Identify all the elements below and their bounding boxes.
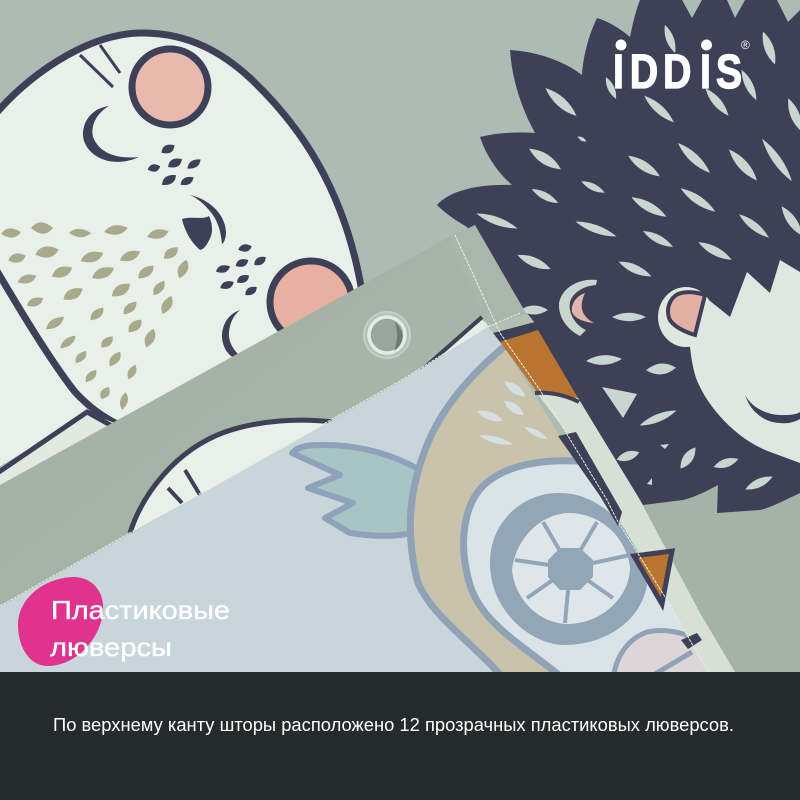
grey strip — [449, 225, 527, 327]
strip dark arc — [535, 393, 579, 402]
strip dark edge band — [558, 432, 622, 526]
teal leaf — [292, 445, 420, 536]
heading line 2: люверсы — [50, 632, 172, 662]
front fabric print — [0, 320, 720, 680]
logo dots — [616, 40, 712, 51]
bear ear lines — [80, 45, 120, 87]
wheel hub — [548, 548, 593, 590]
hedgehog small marks — [647, 444, 669, 485]
bear whisker dots — [216, 244, 266, 296]
bear nose — [182, 216, 212, 250]
caption text: По верхнему канту шторы расположено 12 прозрачных пластиковых люверсов. — [53, 715, 734, 735]
grommet — [364, 312, 410, 358]
wheel inner — [512, 513, 630, 624]
front fabric base — [0, 320, 720, 672]
hem white wedge — [441, 320, 488, 356]
hem bear arc outline — [130, 420, 333, 533]
hedgehog ear base — [658, 287, 714, 347]
cross stitch line — [488, 313, 520, 327]
heading — [50, 595, 230, 662]
hem stitch line — [0, 325, 490, 606]
lower right fabric — [643, 485, 800, 672]
bear lower cheek — [270, 261, 352, 343]
hem bear claw lines — [168, 470, 200, 503]
grey strip lower — [488, 313, 535, 333]
hedgehog smile — [745, 395, 800, 423]
bear upper cheek — [132, 49, 208, 125]
hedgehog ear — [668, 292, 705, 335]
dark band — [493, 322, 539, 342]
hem dark line — [415, 317, 482, 376]
hem band — [0, 237, 500, 607]
fold stitch line — [455, 235, 708, 672]
blue line — [655, 652, 692, 674]
bear eye — [83, 106, 139, 162]
hem fold with grommet — [0, 237, 500, 607]
wheel ring — [490, 493, 647, 645]
logo wordmark: IDDIS — [613, 45, 742, 99]
pink shape — [613, 630, 720, 680]
bear lower body — [0, 415, 113, 485]
bear head shape — [0, 33, 362, 470]
eye white — [464, 461, 720, 680]
light strip — [537, 393, 735, 672]
grommet inner ring — [369, 317, 405, 353]
heading line 1: Пластиковые — [51, 595, 230, 625]
beige body — [410, 346, 720, 680]
wheel spokes — [515, 522, 630, 623]
beige body marks — [476, 378, 549, 448]
hedgehog left ear pink — [572, 293, 594, 323]
bear nose arc — [190, 195, 226, 244]
bear body line — [0, 412, 112, 474]
hedgehog face — [690, 260, 800, 463]
bear olive fur marks — [1, 222, 191, 411]
bear freckles — [148, 144, 200, 186]
stitching — [0, 235, 708, 672]
hedgehog quills — [475, 24, 800, 493]
hedgehog triangle mark — [602, 387, 637, 418]
pink blob — [18, 577, 103, 666]
hem bear arc white — [130, 420, 333, 533]
grommet shadow — [394, 322, 402, 351]
grommet outer ring — [364, 312, 410, 358]
orange band — [500, 330, 578, 398]
hedgehog spiky body — [437, 0, 800, 513]
bear head outline — [0, 33, 362, 424]
right folded strip — [449, 225, 735, 672]
strip dark band — [681, 633, 702, 649]
bear head — [0, 33, 362, 495]
strip orange triangle — [634, 551, 672, 604]
hedgehog left ear arc — [559, 280, 597, 336]
registered mark: ® — [741, 38, 750, 52]
hedgehog — [437, 0, 800, 513]
bear mouth — [222, 310, 240, 358]
logo — [613, 38, 750, 99]
bottom caption band — [0, 672, 800, 800]
